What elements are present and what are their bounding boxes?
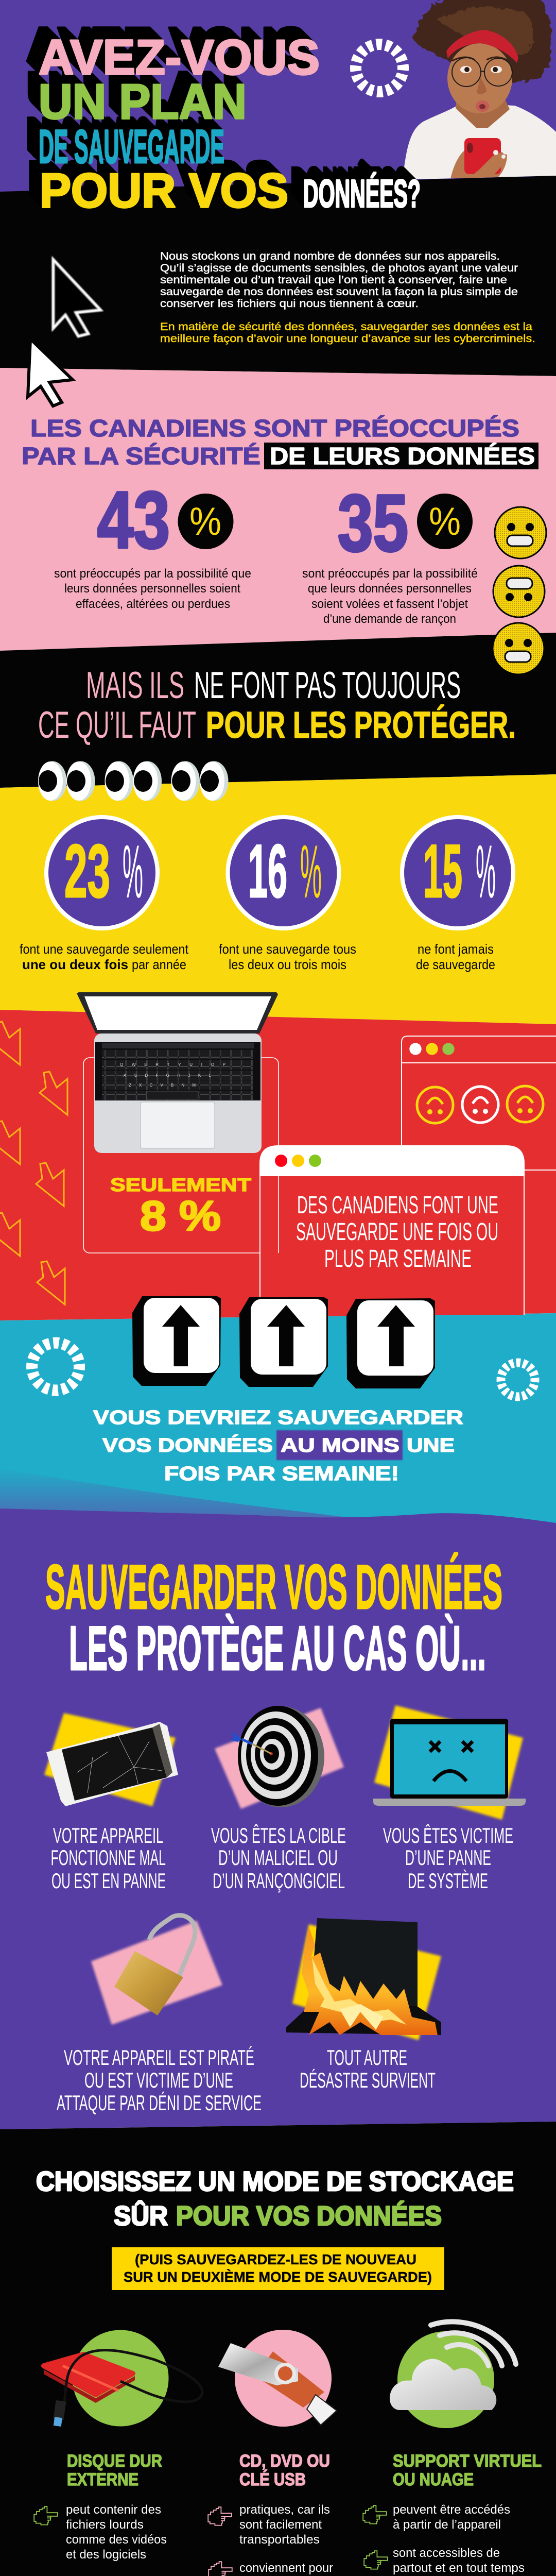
item: sad laptop: D’UNE PANNE (405, 1845, 491, 1870)
bullet text (66, 2503, 167, 2562)
window: front browser with statement: PLUS PAR SEMAINE (324, 1245, 472, 1273)
item: dartboard: D’UN MALICIEL OU (218, 1845, 338, 1870)
intro highlight text (160, 321, 535, 345)
panel background: frequency yellow (0, 774, 556, 1024)
column: cd dvd usb (208, 2330, 351, 2576)
icon: grimacing face 3 (493, 623, 544, 674)
icon: up arrow key 1 (132, 1296, 221, 1386)
stat: 35 percent: 35 (338, 479, 408, 568)
item: broken phone: FONCTIONNE MAL (50, 1845, 166, 1870)
stat: 43 percent: sont préoccupés par la possibilité que (54, 567, 251, 581)
stat: 23 percent: font une sauvegarde seulement (20, 941, 189, 957)
panel: reasons (44, 1552, 526, 2115)
icon: up arrow key 2 (239, 1297, 328, 1387)
title line: pour vos données: POUR VOS (40, 163, 288, 217)
icon: grimacing face 1 (495, 507, 546, 558)
label: DISQUE DUR (67, 2451, 162, 2471)
item: open padlock: OU EST VICTIME D’UNE (84, 2068, 233, 2092)
label: CD, DVD OU (239, 2451, 330, 2471)
stat: 35 percent (302, 479, 478, 626)
outlined box: seulement 8 percent (83, 1058, 279, 1253)
item: sad laptop (373, 1705, 526, 1893)
bullet icon: hand (363, 2505, 387, 2524)
intro text: sentimentale ou d’un travail que l’on tient à conserver, faire une (160, 274, 507, 286)
stat: 16 percent (219, 817, 356, 972)
stat: 35 percent: d’une demande de rançon (323, 612, 456, 626)
stat: 35 percent: % (429, 500, 461, 544)
illustration: laptop: ASDFGHJKL (124, 1073, 212, 1078)
panel background: protect black (0, 633, 556, 788)
bullet text: fichiers lourds (66, 2518, 144, 2532)
panel background: intro black (0, 176, 556, 376)
icon: grimacing face 2 upside down (493, 566, 545, 617)
intro text: Qu’il s’agisse de documents sensibles, de photos ayant une valeur (160, 262, 518, 274)
panel: storage modes (34, 2166, 542, 2576)
bullet text: pratiques, car ils (239, 2503, 330, 2517)
title line: pour vos données: DONNÉES? (303, 172, 421, 216)
item: broken phone: VOTRE APPAREIL (53, 1823, 163, 1848)
callout: second backup: SUR UN DEUXIÈME MODE DE SAUVEGARDE) (124, 2269, 432, 2285)
advice text (93, 1407, 463, 1485)
item: burning laptop: TOUT AUTRE (327, 2045, 407, 2070)
window: back browser with upside-down smileys (402, 1036, 556, 1170)
stat: 16 percent: les deux ou trois mois (229, 957, 346, 972)
bullet text (393, 2546, 525, 2575)
label: SUPPORT VIRTUEL (393, 2451, 542, 2471)
item: sad laptop: DE SYSTÈME (408, 1869, 488, 1893)
stat: 16 percent: % (300, 829, 322, 913)
panel background: weekly red (0, 1010, 556, 1320)
advice text: UNE (407, 1435, 455, 1456)
intro text: Nous stockons un grand nombre de données sur nos appareils. (160, 250, 500, 262)
bullet text: à partir de l’appareil (393, 2518, 501, 2532)
icon: googly eyes (38, 761, 229, 801)
icon: up arrow key 3 (346, 1298, 435, 1388)
heading (45, 1552, 502, 1683)
illustration: laptop (77, 992, 278, 1153)
heading: PAR LA SÉCURITÉ (22, 443, 260, 469)
heading: DE LEURS DONNÉES (270, 443, 535, 469)
panel: intro (28, 250, 535, 406)
item: open padlock: ATTAQUE PAR DÉNI DE SERVICE (57, 2091, 262, 2115)
bullet icon: hand (364, 2551, 388, 2569)
item: burning laptop: DÉSASTRE SURVIENT (300, 2068, 436, 2092)
item: dartboard: D’UN RANÇONGICIEL (213, 1869, 345, 1893)
bullet text: sont accessibles de (393, 2546, 500, 2560)
intro highlight text: En matière de sécurité des données, sauvegarder ses données est la (160, 321, 532, 333)
bullet icon: hand (208, 2562, 232, 2576)
item: broken phone: OU EST EN PANNE (51, 1869, 166, 1893)
column: cloud (363, 2321, 542, 2575)
stat: 16 percent: font une sauvegarde tous (219, 941, 356, 957)
callout: second backup: (PUIS SAUVEGARDEZ-LES DE NOUVEAU (135, 2251, 416, 2267)
illustration: laptop: ZXCVBNM (129, 1083, 196, 1088)
illustration: laptop: QWERTYUIOP (120, 1062, 225, 1067)
panel background: wave gradient (0, 1468, 360, 1519)
intro text (160, 250, 518, 310)
label (239, 2451, 330, 2489)
photo: surprised woman with phone (403, 0, 556, 180)
panel background: concern pink (0, 368, 556, 651)
bullet text: et des logiciels (66, 2548, 146, 2562)
heading: CHOISISSEZ UN MODE DE STOCKAGE (36, 2166, 514, 2197)
stat: 15 percent: 15 (423, 829, 462, 913)
callout: second backup (112, 2247, 444, 2290)
panel: backup frequency (20, 817, 513, 972)
item: burning laptop (286, 1918, 441, 2092)
panel: hero: DE SAUVEGARDE (39, 121, 224, 173)
label: CLÉ USB (239, 2470, 306, 2489)
stat: 23 percent: une ou deux fois (22, 957, 128, 972)
item: broken phone (44, 1713, 178, 1893)
item: open padlock (57, 1916, 262, 2115)
stat: 23 percent: 23 (64, 829, 110, 913)
title line: avez-vous: AVEZ-VOUS (39, 30, 320, 85)
stat: 15 percent: ne font jamais (418, 941, 494, 957)
bullet text: transportables (239, 2533, 320, 2547)
panel background: storage black (0, 2122, 556, 2576)
bullet text: peut contenir des (66, 2503, 161, 2517)
title line: un plan: UN PLAN (39, 74, 247, 129)
panel background: advice teal (0, 1313, 556, 1525)
stat: 43 percent: effacées, altérées ou perdues (76, 597, 230, 611)
bullet text: comme des vidéos (66, 2533, 167, 2547)
stat: 23 percent: par année (132, 957, 186, 972)
stat: 15 percent (402, 817, 513, 972)
heading: CE QU’IL FAUT (38, 704, 196, 746)
heading (38, 665, 516, 746)
stat: 15 percent: % (476, 829, 496, 913)
panel background: reasons purple (0, 1509, 556, 2129)
item: dartboard: VOUS ÊTES LA CIBLE (211, 1823, 346, 1848)
outlined box: seulement 8 percent: 8 % (140, 1193, 221, 1240)
label (393, 2451, 542, 2489)
panel: advice (29, 1296, 536, 1485)
panel: not protecting (38, 665, 516, 801)
icon: usb key (218, 2330, 337, 2427)
stat: 23 percent (20, 817, 189, 972)
intro text: sauvegarde de nos données est souvent la façon la plus simple de (160, 286, 518, 298)
stat: 35 percent: sont préoccupés par la possibilité (302, 567, 478, 581)
stat: 43 percent: % (189, 500, 221, 544)
advice text: VOUS DEVRIEZ SAUVEGARDER (93, 1407, 463, 1429)
stat: 15 percent: de sauvegarde (416, 957, 495, 972)
panel: weekly backup (0, 992, 556, 1315)
icon: spinner left (29, 1341, 82, 1393)
decorative pixel cursors (0, 1022, 67, 1304)
stat: 43 percent (54, 476, 251, 611)
column: external drive (34, 2330, 202, 2576)
bullet icon: hand (208, 2507, 232, 2526)
heading: SÛR (114, 2200, 168, 2231)
advice text: AU MOINS (281, 1435, 399, 1456)
icon: loading spinner (353, 41, 406, 95)
label: EXTERNE (67, 2470, 138, 2489)
advice text: VOS DONNÉES (102, 1434, 273, 1456)
bullet text: partout et en tout temps (393, 2561, 525, 2575)
heading: MAIS ILS (86, 665, 184, 706)
panel: canadians concerned (22, 415, 546, 674)
icon: filled cursor (28, 339, 73, 406)
bullet text (393, 2503, 510, 2532)
bullet text (239, 2503, 330, 2547)
label (67, 2451, 162, 2489)
icon: outline cursor (53, 259, 101, 336)
bullet text: conviennent pour (239, 2561, 333, 2575)
bullet text: peuvent être accédés (393, 2503, 510, 2517)
stat: 23 percent: % (123, 829, 143, 913)
panel: hero (39, 0, 556, 217)
icon: spinner right (499, 1361, 536, 1398)
title line: pour vos données (40, 163, 421, 217)
stat: 35 percent: que leurs données personnelles (308, 582, 472, 596)
panel background: hero purple (0, 0, 556, 194)
heading: LES CANADIENS SONT PRÉOCCUPÉS (30, 415, 519, 442)
outlined box: seulement 8 percent: SEULEMENT (110, 1174, 251, 1195)
icon: red external drive (44, 2330, 202, 2427)
advice text: FOIS PAR SEMAINE! (164, 1463, 399, 1485)
intro highlight text: meilleure façon d’avoir une longueur d’avance sur les cybercriminels. (160, 333, 535, 345)
heading (22, 415, 538, 469)
item: open padlock: VOTRE APPAREIL EST PIRATÉ (64, 2045, 254, 2070)
heading (36, 2166, 514, 2231)
label: OU NUAGE (393, 2470, 474, 2489)
bullet text: sont facilement (239, 2518, 322, 2532)
item: dartboard (211, 1706, 346, 1893)
stat: 16 percent: 16 (248, 829, 287, 913)
icon: cloud with signal (390, 2321, 516, 2428)
heading: POUR VOS DONNÉES (176, 2200, 442, 2231)
stat: 43 percent: 43 (97, 476, 170, 565)
stat: 43 percent: leurs données personnelles soient (64, 582, 240, 596)
window: front browser with statement (260, 1146, 524, 1315)
intro text: conserver les fichiers qui nous tiennent à cœur. (160, 298, 419, 310)
stat: 35 percent: soient volées et fassent l’objet (311, 597, 468, 611)
bullet icon: hand (34, 2506, 58, 2525)
